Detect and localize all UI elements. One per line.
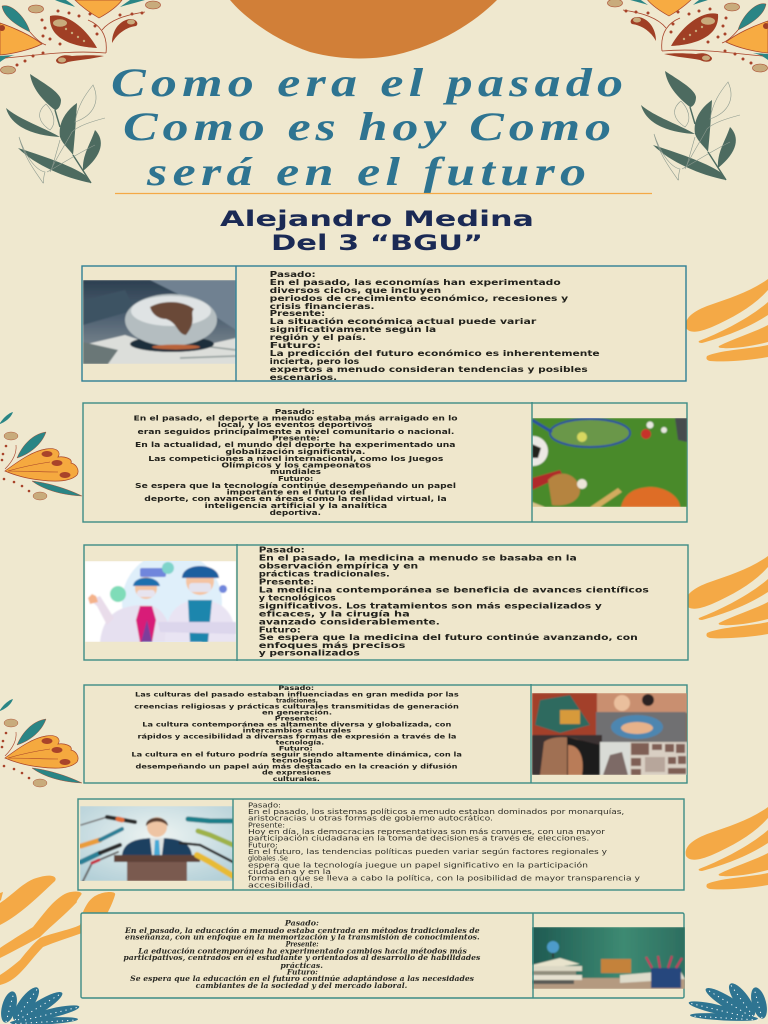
text: deporte: Olímpicos y los campeonatos [221,460,371,470]
text: política: aristocracias u otras formas de gobierno autocrático. [248,814,493,823]
text: educación: participativos, centrados en el estudiante y orientados al desarrollo de habilidades [123,953,480,962]
text: política: Futuro: [248,841,278,850]
text: política: accesibilidad. [248,880,313,889]
text: economía: escenarios. [270,373,337,382]
author heading: Del 3 “BGU” [271,231,483,255]
text: medicina: prácticas tradicionales. [259,570,390,579]
text: cultura: Presente: [275,716,318,722]
text: economía: Pasado: [270,270,316,279]
title underline [115,192,652,194]
panel: deporte [83,402,687,522]
icon: bottom right fern [688,980,768,1022]
text: cultura: de expresiones [262,770,331,776]
icon: right leaf branch [641,71,740,180]
text: deporte: mundiales [270,467,321,476]
text: economía: incierta, pero los [270,357,360,366]
text: cultura: tradiciones, [276,698,318,704]
panel: medicina [84,544,688,661]
ornament: right orange rays lower [686,807,768,889]
image: books and chalkboard [532,927,685,989]
ornament: right orange rays middle [686,556,768,638]
text: medicina: Se espera que la medicina del futuro continúe avanzando, con [259,633,638,642]
text: economía: expertos a menudo consideran tendencias y posibles [270,365,588,374]
text: educación: enseñanza, con un enfoque en la memorización y la transmisión de conocimientos. [125,932,480,942]
text: deporte: inteligencia artificial y la analítica [204,501,387,510]
top orange shape [230,0,497,58]
text: cultura: La cultura contemporánea es altamente diversa y globalizada, con [142,720,451,728]
text: medicina: La medicina contemporánea se beneficia de avances científicos [259,586,649,595]
text: política: En el pasado, los sistemas políticos a menudo estaban dominados por monarquías, [248,807,624,816]
title: Como era el pasado [111,62,623,105]
divider [235,266,237,381]
panel: cultura [84,684,687,783]
text: medicina: enfoques más precisos [259,641,406,650]
text: deporte: local, y los eventos deportivos [218,420,372,429]
panel frame [78,799,684,890]
text: cultura: Futuro: [279,746,313,752]
text: cultura: tecnología [272,756,322,764]
ornament: top right mandala [608,0,768,72]
text: economía: La predicción del futuro económico es inherentemente [270,349,600,358]
text: política [248,800,641,889]
text: cultura: rápidos y accesibilidad a diversas formas de expresión a través de la [138,732,456,740]
text: educación: cambiantes de la sociedad y del mercado laboral. [196,981,407,990]
text: deporte: eran seguidos principalmente a nivel comunitario o nacional. [138,427,454,436]
text: deporte: Futuro: [278,474,313,483]
icon: bottom left fern [0,984,80,1024]
text: cultura: desempeñando un papel aún más destacado en la creación y difusión [136,762,458,770]
ornament: left flower upper [0,412,82,500]
text: deporte: deportiva. [270,508,321,517]
text: cultura: culturales. [273,776,320,783]
text: medicina: avanzado considerablemente. [259,617,440,626]
text: política: Pasado: [248,800,281,809]
panel frame [84,545,688,660]
text: deporte: importante en el futuro del [227,488,365,496]
title: será en el futuro [146,151,586,194]
text: cultura: en generación. [262,708,332,716]
text: política: ciudadana y en la [248,867,331,876]
text: medicina: significativos. Los tratamientos son más especializados y [259,601,602,610]
text: política: espera que la tecnología juegue un papel significativo en la participación [248,860,588,869]
text: deporte: En el pasado, el deporte a menudo estaba más arraigado en lo [134,414,458,422]
divider [531,402,533,522]
panel frame [83,403,687,522]
text: deporte: Se espera que la tecnología continúe desempeñando un papel [135,481,456,490]
text: política: participación ciudadana en la toma de decisiones a través de elecciones. [248,834,589,843]
text: medicina: Futuro: [259,625,301,634]
text: deporte: En la actualidad, el mundo del deporte ha experimentado una [135,440,456,449]
image: doctors illustration [85,561,236,642]
text: educación: La educación contemporánea ha experimentado cambios hacia métodos más [137,946,467,956]
text: educación: Presente: [285,940,319,948]
panel: educación [81,913,685,998]
title: Como es hoy Como [123,106,611,149]
text: deporte: Presente: [272,434,320,442]
image: politician at podium [80,806,233,885]
text: cultura: tecnología. [276,738,324,746]
text: medicina: observación empírica y en [259,562,418,571]
text: cultura: La cultura en el futuro podría seguir siendo altamente dinámica, con la [131,750,462,758]
text: medicina: Presente: [259,578,314,587]
text: economía: crisis financieras. [270,302,375,311]
ornament: bottom left orange waves [0,876,115,985]
ornament: top left mandala [0,0,160,74]
text: deporte [134,407,458,517]
text: economía: significativamente según la [270,325,436,334]
text: economía: diversos ciclos, que incluyen [270,286,441,295]
text: cultura: Las culturas del pasado estaban influenciadas en gran medida por las [135,692,459,698]
panel frame [81,913,684,998]
title [111,62,623,194]
panel frame [82,266,686,381]
text: deporte: Pasado: [275,407,315,416]
text: economía: Futuro: [270,341,321,350]
divider [530,684,532,783]
image: sports equipment on grass [518,418,687,507]
text: educación [123,918,480,990]
text: política: globales .Se [248,854,289,863]
text: economía [270,270,600,382]
author heading: Alejandro Medina [220,207,534,231]
text: educación: Futuro: [286,968,318,976]
text: economía: región y el país. [270,333,366,342]
image: glass globe on money [83,280,236,364]
text: economía: periodos de crecimiento económico, recesiones y [270,294,568,303]
text: medicina [259,545,649,658]
text: cultura: intercambios culturales [243,728,351,734]
author heading [220,207,534,255]
text: educación: Se espera que la educación en el futuro continúe adaptándose a las necesidades [130,974,474,983]
divider [532,913,534,998]
text: medicina: y tecnológicos [259,594,336,603]
text: educación: En el pasado, la educación a menudo estaba centrada en métodos tradicionales de [124,926,480,935]
divider [236,544,238,661]
panel: política [78,799,684,890]
text: educación: prácticas. [280,961,323,970]
text: cultura [131,685,462,783]
divider [232,799,234,890]
text: economía: Presente: [270,309,325,318]
text: medicina: y personalizados [259,649,360,658]
text: política: forma en que se lleva a cabo la política, con la posibilidad de mayor transparencia y [248,874,641,883]
text: medicina: eficaces, y la cirugía ha [259,609,410,618]
text: medicina: En el pasado, la medicina a menudo se basaba en la [259,554,577,563]
text: cultura: Pasado: [278,685,314,692]
text: política: Presente: [248,820,285,829]
ornament: left flower lower [0,699,82,787]
panel: economía [82,266,686,382]
text: economía: La situación económica actual puede variar [270,317,536,326]
text: medicina: Pasado: [259,545,305,554]
icon: left leaf branch [6,74,105,183]
text: deporte: deporte, con avances en áreas como la realidad virtual, la [144,494,447,503]
text: política: En el futuro, las tendencias políticas pueden variar según factores regionales y [248,847,608,856]
text: cultura: creencias religiosas y prácticas culturales transmitidas de generación [134,702,459,710]
text: deporte: Las competiciones a nivel internacional, como los Juegos [148,454,443,463]
panel frame [84,685,687,783]
ornament: right orange rays upper [686,279,768,361]
text: deporte: globalización significativa. [225,447,365,456]
image: cultural collage [532,693,687,775]
text: educación: Pasado: [284,918,319,928]
text: política: Hoy en día, las democracias representativas son más comunes, con una mayor [248,827,605,836]
text: economía: En el pasado, las economías han experimentado [270,278,562,287]
